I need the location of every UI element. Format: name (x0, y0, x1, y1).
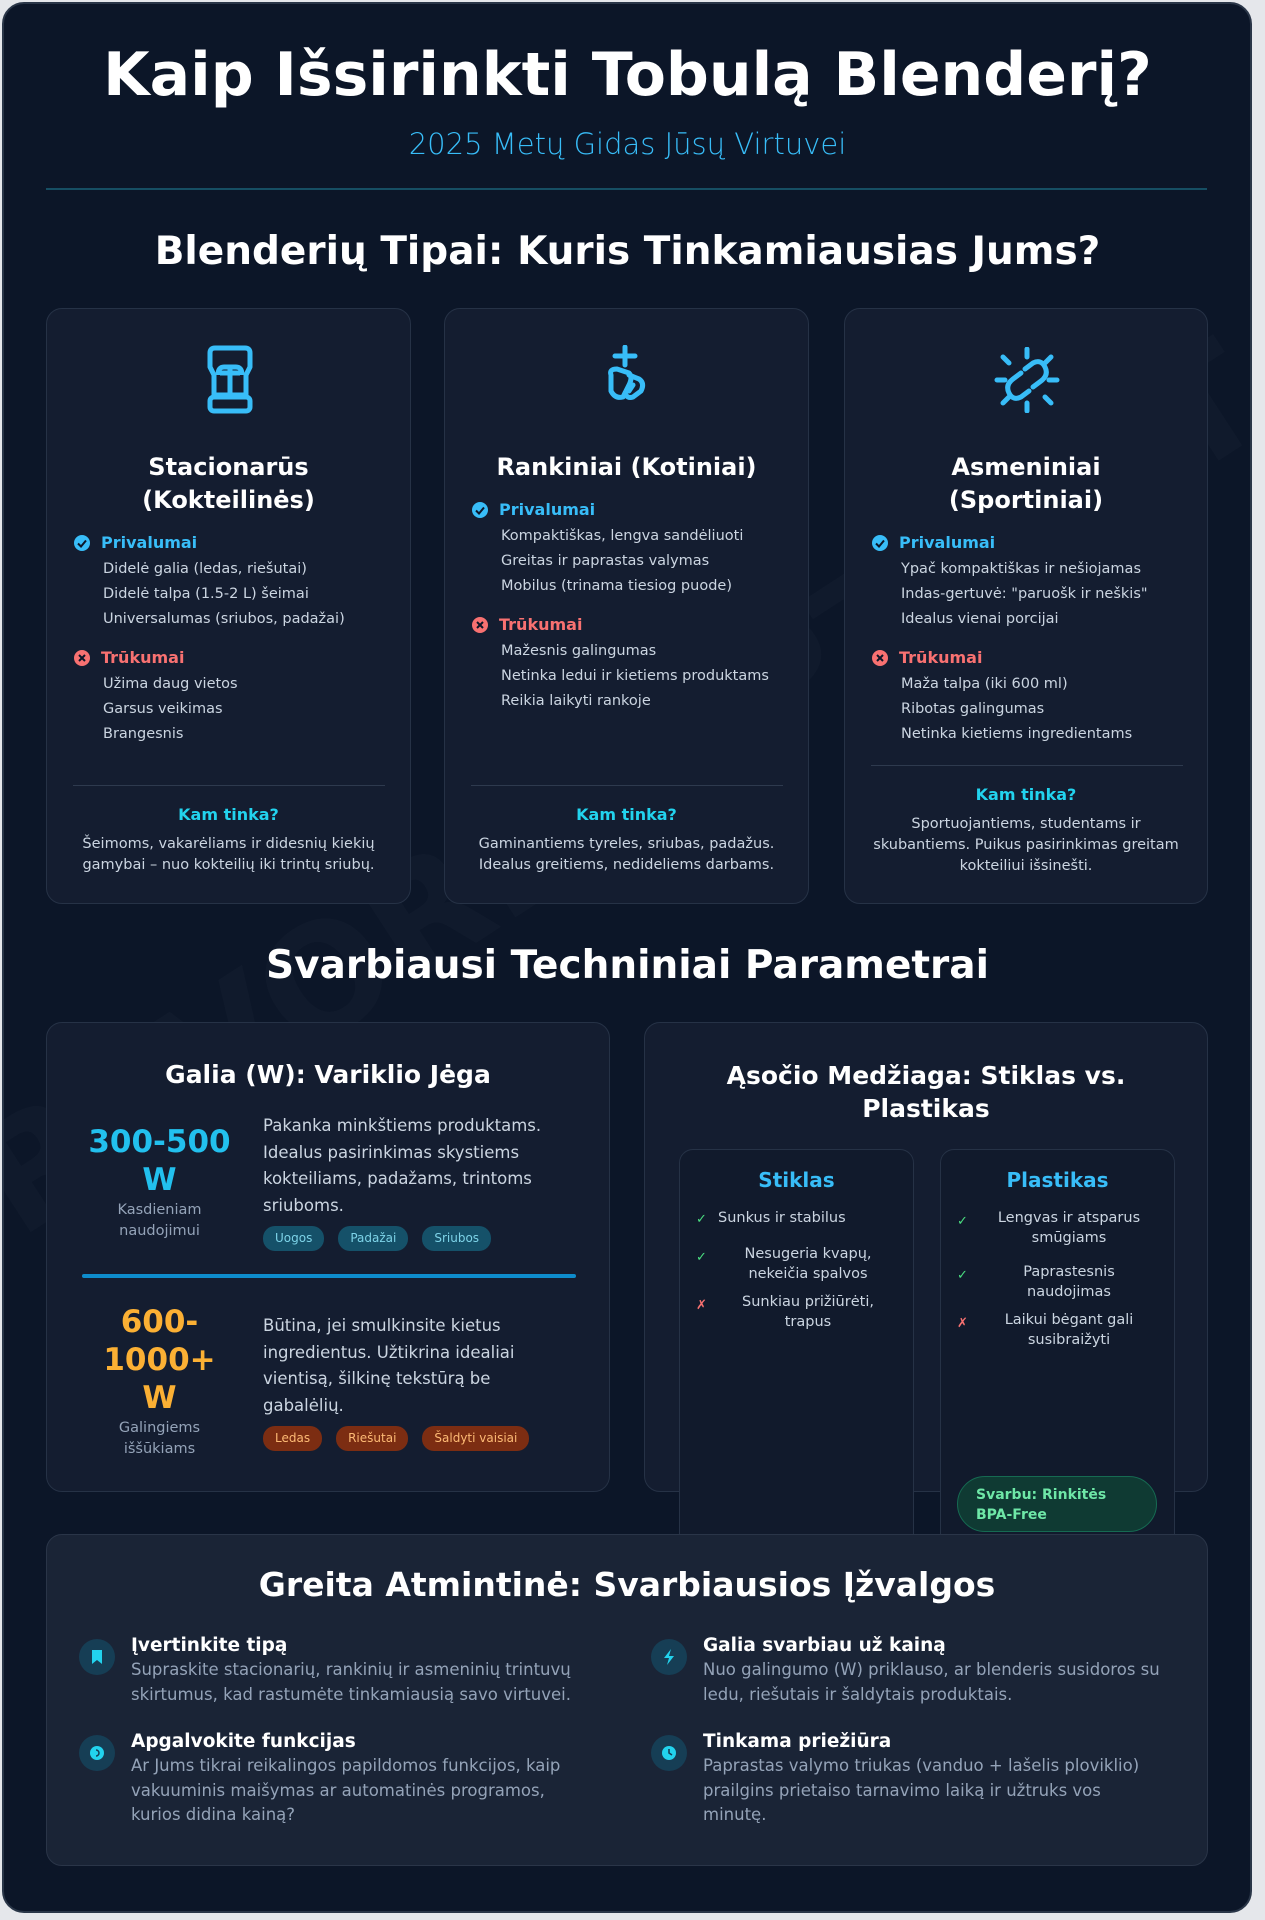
panel: stationary: Stacionarūs (148, 453, 309, 481)
panel: stationary: Kam tinka? (178, 805, 279, 824)
stat: 600-1000+ W: iššūkiams (124, 1441, 195, 1457)
panel: personal: Sportuojantiems, studentams ir (911, 816, 1141, 832)
panel: materials: Plastikas (862, 1094, 990, 1123)
panel: stationary: (Kokteilinės) (142, 486, 315, 514)
panel: handheld: Kam tinka? (576, 805, 677, 824)
panel: stationary: Didelė galia (ledas, riešutai) (103, 561, 307, 577)
panel: personal: Idealus vienai porcijai (901, 611, 1059, 627)
badge: BPA-free: BPA-Free (976, 1507, 1047, 1523)
panel: handheld: Privalumai (499, 500, 595, 519)
panel: materials (644, 1022, 1208, 1492)
panel: personal: skubantiems. Puikus pasirinkimas greitam (873, 837, 1179, 853)
badge: BPA-free (957, 1476, 1157, 1532)
item: power: Galia svarbiau už kainą (703, 1635, 946, 1656)
stat: 600-1000+ W: 1000+ (103, 1342, 216, 1378)
panel: stationary: Trūkumai (101, 648, 184, 667)
sub-panel: plastic: Lengvas ir atsparus (998, 1210, 1140, 1226)
panel: power: Galia (W): Variklio Jėga (165, 1060, 491, 1089)
stat: 600-1000+ W (103, 1304, 216, 1457)
panel: stationary: Užima daug vietos (103, 676, 238, 692)
stat: 300-500 W: W (142, 1162, 177, 1198)
heading: technical: Svarbiausi Techniniai Parametrai (266, 943, 989, 988)
item: type: Supraskite stacionarių, rankinių ir asmeninių trintuvų skirtumus, kad rastumėte tinkamiausią savo virtuvei. (131, 1660, 571, 1704)
stat: 300-500 W: 300-500 (88, 1124, 231, 1160)
item: care: Tinkama priežiūra (703, 1731, 891, 1752)
panel: handheld: Greitas ir paprastas valymas (501, 553, 709, 569)
sub-panel: plastic: ✓ (957, 1268, 968, 1283)
heading: types: Blenderių Tipai: Kuris Tinkamiausias Jums? (155, 229, 1100, 274)
stat: 600-1000+ W: W (142, 1380, 177, 1416)
panel: stationary: Privalumai (101, 533, 197, 552)
subtitle: 2025 Metų Gidas Jūsų Virtuvei (409, 127, 846, 161)
stat: 300-500 W (88, 1124, 231, 1239)
panel: stationary: Brangesnis (103, 726, 183, 742)
panel: personal: Trūkumai (899, 648, 982, 667)
item: power (651, 1635, 1160, 1704)
panel: handheld: Idealus greitiems, nedideliems darbams. (479, 857, 774, 873)
icon: blender (208, 346, 252, 414)
panel: personal: Indas-gertuvė: "paruošk ir neškis" (901, 586, 1148, 602)
sub-panel: plastic: susibraižyti (1028, 1332, 1110, 1348)
panel: stationary: Universalumas (sriubos, padažai) (103, 611, 345, 627)
item: functions (79, 1731, 560, 1824)
panel: personal: Maža talpa (iki 600 ml) (901, 676, 1068, 692)
sub-panel: plastic: Paprastesnis (1023, 1264, 1115, 1280)
panel: power (46, 1022, 610, 1492)
panel: handheld: Netinka ledui ir kietiems produktams (501, 668, 769, 684)
icon: hand blender (608, 345, 646, 400)
sub-panel: glass: trapus (785, 1314, 831, 1330)
panel: personal: Ypač kompaktiškas ir nešiojamas (901, 561, 1141, 577)
badge: BPA-free: Svarbu: Rinkitės (976, 1487, 1106, 1503)
sub-panel: plastic (940, 1149, 1175, 1549)
sub-panel: plastic: ✗ (957, 1316, 968, 1331)
panel: power: Uogos (275, 1231, 312, 1245)
panel: power: Ledas (275, 1431, 310, 1445)
item: type: Įvertinkite tipą (131, 1635, 287, 1656)
sub-panel: glass: ✓ (696, 1212, 707, 1227)
item: power: Nuo galingumo (W) priklauso, ar blenderis susidoros su ledu, riešutais ir šaldytais produktais. (703, 1660, 1160, 1704)
panel: quick summary: Greita Atmintinė: Svarbiausios Įžvalgos (259, 1565, 995, 1604)
item: care (651, 1731, 1139, 1824)
icon: link chain (994, 347, 1060, 413)
panel: handheld: Gaminantiems tyreles, sriubas, padažus. (479, 836, 774, 852)
panel: personal: kokteiliui išsinešti. (960, 858, 1092, 874)
item: care: Paprastas valymo triukas (vanduo + lašelis ploviklio) prailgins prietaiso tarnavimo laiką ir užtruks vos minutę. (703, 1756, 1139, 1824)
panel: stationary: Didelė talpa (1.5-2 L) šeimai (103, 586, 309, 602)
sub-panel: glass: Nesugeria kvapų, (744, 1246, 872, 1262)
panel: personal: Ribotas galingumas (901, 701, 1044, 717)
sub-panel: glass: ✗ (696, 1298, 707, 1313)
sub-panel: plastic: smūgiams (1032, 1230, 1106, 1246)
panel: personal: Asmeniniai (951, 453, 1101, 481)
sub-panel: glass: ✓ (696, 1250, 707, 1265)
panel: stationary: Garsus veikimas (103, 701, 223, 717)
panel: handheld: Mobilus (trinama tiesiog puode) (501, 578, 732, 594)
panel: power: Sriubos (434, 1231, 479, 1245)
item: type (79, 1635, 571, 1704)
panel: personal (844, 308, 1208, 904)
panel: handheld: Mažesnis galingumas (501, 643, 656, 659)
panel: power: Būtina, jei smulkinsite kietus ingredientus. Užtikrina idealiai vientisą, šilkinę tekstūrą be gabalėlių. (263, 1316, 514, 1414)
title: Kaip Išsirinkti Tobulą Blenderį? (103, 40, 1152, 110)
sub-panel: glass: Sunkus ir stabilus (718, 1210, 846, 1226)
sub-panel: glass: Sunkiau prižiūrėti, (742, 1294, 874, 1310)
panel: handheld: Trūkumai (499, 615, 582, 634)
stat: 300-500 W: Kasdieniam (117, 1202, 202, 1218)
stat: 300-500 W: naudojimui (119, 1223, 200, 1239)
sub-panel: plastic: naudojimas (1027, 1284, 1111, 1300)
panel: handheld: Reikia laikyti rankoje (501, 693, 651, 709)
panel: handheld (444, 308, 809, 904)
panel: materials: Ąsočio Medžiaga: Stiklas vs. (727, 1061, 1125, 1090)
panel: stationary: Šeimoms, vakarėliams ir didesnių kiekių (82, 836, 375, 852)
panel: power: Pakanka minkštiems produktams. Idealus pasirinkimas skystiems kokteiliams, padažams, trintoms sriuboms. (263, 1116, 541, 1214)
sub-panel: glass: Stiklas (758, 1168, 835, 1192)
panel: personal: Netinka kietiems ingredientams (901, 726, 1132, 742)
panel: stationary (46, 308, 411, 904)
item: functions: Ar Jums tikrai reikalingos papildomos funkcijos, kaip vakuuminis maišymas ar automatinės programos, kurios didina kainą? (131, 1756, 560, 1824)
panel: personal: (Sportiniai) (949, 486, 1103, 514)
sub-panel: plastic: Plastikas (1006, 1168, 1109, 1192)
sub-panel: glass (679, 1149, 914, 1549)
sub-panel: plastic: Laikui bėgant gali (1005, 1312, 1133, 1328)
panel: power: Šaldyti vaisiai (434, 1431, 517, 1445)
sub-panel: plastic: ✓ (957, 1214, 968, 1229)
stat: 600-1000+ W: Galingiems (119, 1420, 200, 1436)
stat: 600-1000+ W: 600- (121, 1304, 198, 1340)
sub-panel: glass: nekeičia spalvos (748, 1266, 868, 1282)
panel: handheld: Rankiniai (Kotiniai) (496, 453, 757, 481)
panel: handheld: Kompaktiškas, lengva sandėliuoti (501, 528, 743, 544)
panel: power: Riešutai (348, 1431, 396, 1445)
panel: personal: Privalumai (899, 533, 995, 552)
panel: power: Padažai (350, 1231, 396, 1245)
panel: personal: Kam tinka? (976, 785, 1076, 804)
panel: stationary: gamybai – nuo kokteilių iki trintų sriubų. (82, 857, 375, 873)
panel: quick summary (46, 1534, 1208, 1866)
item: functions: Apgalvokite funkcijas (131, 1731, 356, 1752)
